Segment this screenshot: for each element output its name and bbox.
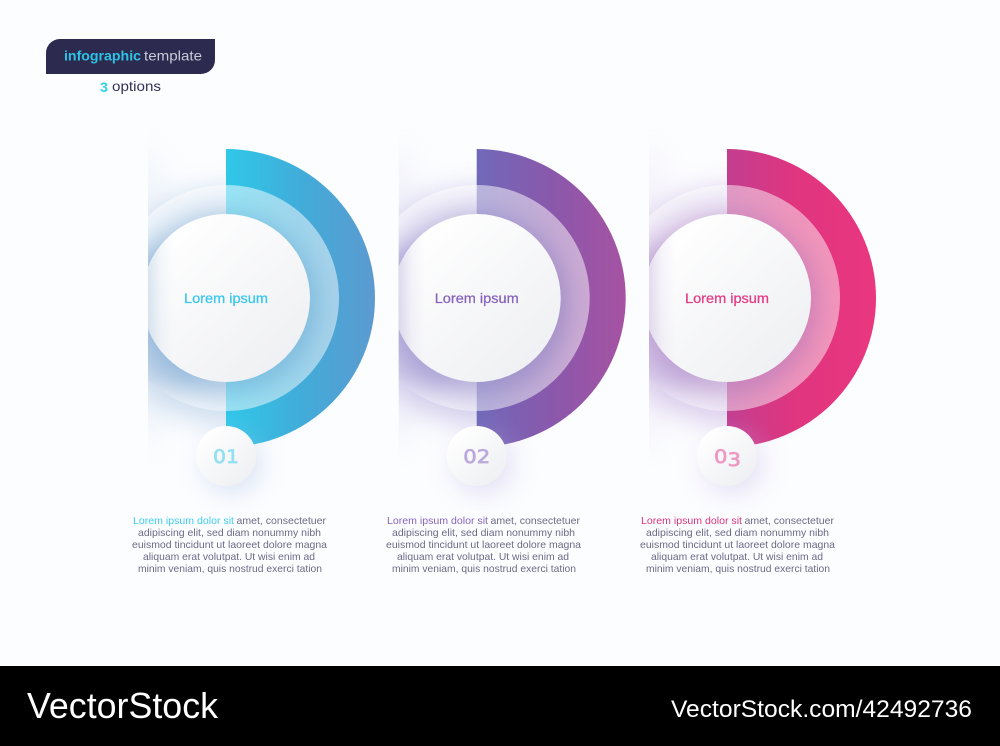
number badge [196, 426, 262, 494]
header: infographic template: template [144, 48, 202, 64]
footer url: VectorStock.com/42492736 [671, 696, 972, 723]
footer logo text: VectorStock [27, 685, 219, 726]
text block: option 01: minim veniam, quis nostrud exerci tation [138, 563, 322, 575]
header: infographic template: infographic [64, 48, 141, 64]
text block: option 01: adipiscing elit, sed diam nonummy nibh [138, 527, 321, 539]
outer glow [398, 177, 477, 434]
translucent ring [398, 185, 590, 411]
text block: option 02 [386, 515, 581, 575]
number badge [697, 426, 763, 494]
ring inner shadow [398, 202, 576, 406]
inner circle edge shade [649, 244, 664, 352]
subtitle: 3 options: options [112, 78, 161, 94]
footer bar [0, 666, 1000, 746]
panel: option 01 [148, 149, 375, 500]
header: infographic template [46, 39, 215, 74]
text block: option 02: adipiscing elit, sed diam nonummy nibh [392, 527, 575, 539]
half disc [727, 149, 876, 447]
text block: option 01: Lorem ipsum dolor sit [133, 515, 234, 527]
text block: option 02: aliquam erat volutpat. Ut wisi enim ad [397, 551, 569, 563]
text block: option 02: amet, consectetuer [490, 515, 581, 527]
ring inner shadow [148, 201, 325, 406]
text block: option 03: minim veniam, quis nostrud exerci tation [646, 563, 830, 575]
outer glow [649, 177, 727, 434]
translucent ring [148, 185, 339, 411]
inner circle [142, 214, 310, 382]
ring inner shadow [649, 202, 825, 406]
number badge: 0 [714, 446, 726, 468]
text block: option 03 [640, 515, 835, 575]
text block: option 01: euismod tincidunt ut laoreet dolore magna [132, 539, 327, 551]
label: Lorem ipsum [435, 291, 519, 306]
text block: option 02: Lorem ipsum dolor sit [387, 515, 488, 527]
text block: option 03: amet, consectetuer [744, 515, 835, 527]
number badge: 02 [463, 446, 490, 468]
half disc [226, 149, 375, 447]
label: Lorem ipsum [685, 291, 769, 306]
outer glow [148, 174, 226, 434]
number badge: 01 [213, 446, 239, 468]
number badge: 3 [728, 449, 741, 471]
half disc [477, 149, 626, 447]
text block: option 03: adipiscing elit, sed diam nonummy nibh [646, 527, 829, 539]
text block: option 01: amet, consectetuer [236, 515, 327, 527]
panel: option 03 [649, 149, 876, 499]
number badge [447, 426, 513, 494]
inner circle [393, 214, 561, 382]
text block: option 01: aliquam erat volutpat. Ut wisi enim ad [143, 551, 315, 563]
text block: option 02: minim veniam, quis nostrud exerci tation [392, 563, 576, 575]
header pill [46, 39, 215, 74]
subtitle: 3 options: 3 [100, 79, 108, 95]
inner circle [643, 214, 811, 382]
panel: option 02 [398, 149, 626, 499]
text block: option 03: euismod tincidunt ut laoreet dolore magna [640, 539, 835, 551]
subtitle: 3 options [100, 78, 161, 95]
text block: option 03: aliquam erat volutpat. Ut wisi enim ad [651, 551, 823, 563]
inner circle edge shade [398, 244, 414, 352]
inner circle edge shade [148, 243, 164, 352]
text block: option 02: euismod tincidunt ut laoreet dolore magna [386, 539, 581, 551]
text block: option 01 [132, 515, 327, 575]
text block: option 03: Lorem ipsum dolor sit [641, 515, 742, 527]
label: Lorem ipsum [184, 291, 268, 306]
translucent ring [649, 185, 840, 411]
